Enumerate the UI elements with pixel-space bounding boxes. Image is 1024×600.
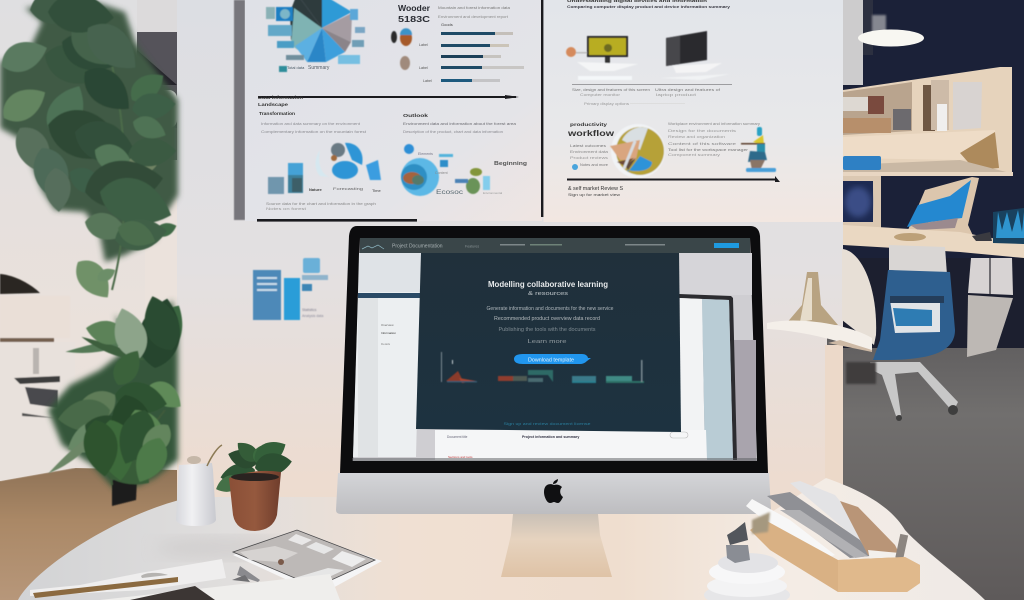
workflow heading: Latest outcomes	[570, 144, 606, 148]
pie labels	[287, 65, 330, 71]
pie side icons	[266, 7, 365, 72]
section text: left: Information and data summary on the environment	[261, 122, 361, 126]
upper climbing plant	[0, 0, 179, 305]
section text: right: Environment data and information about the forest area	[403, 122, 517, 126]
globe labels	[418, 152, 527, 196]
globe labels: Environmental	[483, 191, 503, 195]
bar chart	[419, 32, 524, 83]
illustration labels: Time	[372, 188, 382, 193]
bar chart: Label	[419, 43, 428, 47]
dark tablet at edge	[130, 586, 215, 600]
top text lines: Comparing computer display product and device information summary	[567, 4, 731, 9]
bottom white pane: Sections and tools	[448, 455, 473, 459]
section text: left: Data information	[258, 95, 303, 100]
top toolbar: Features	[465, 244, 479, 248]
background: main wall	[177, 0, 843, 600]
main desk	[18, 478, 985, 600]
ceramic stack and figurine	[704, 512, 790, 600]
footer text: & self market Review S	[568, 186, 624, 192]
tablet on desk	[233, 530, 382, 595]
call to action button	[514, 354, 591, 364]
top toolbar: Project Documentation	[392, 244, 443, 250]
globe labels: Elements	[418, 152, 433, 156]
left light pane: Details	[381, 342, 391, 346]
left light pane: Information	[381, 331, 396, 335]
workflow text	[668, 122, 760, 157]
top text lines	[567, 0, 731, 9]
small wall graphic: Analysis data	[302, 314, 323, 318]
workflow text: Tool list for the workspace manager	[668, 148, 749, 152]
divider arrow	[258, 95, 519, 99]
icons beside bars	[391, 28, 412, 70]
section text: left: Landscape	[258, 102, 289, 107]
heading: Wooder	[398, 4, 430, 13]
foliage mass	[48, 300, 178, 490]
device captions: Ultra design and features of	[655, 88, 721, 92]
monitor chin	[336, 473, 771, 514]
top toolbar	[360, 238, 750, 253]
mini charts	[441, 352, 644, 383]
section text: left: Transformation	[259, 111, 295, 116]
panel footer: Sign up and review document license	[504, 422, 590, 426]
blue box on shelf	[843, 156, 881, 170]
heading: 5183C	[398, 15, 430, 24]
workflow text: Review and organization	[668, 135, 725, 139]
bottom white pane: Document title	[447, 435, 468, 439]
section text: right: Description of the product, chart and data information	[403, 130, 503, 134]
pencil and eraser	[232, 566, 260, 582]
panel body text: Generate information and documents for the new service	[486, 306, 614, 312]
globe labels: Content	[435, 171, 448, 175]
workflow heading: Notes and more	[580, 163, 608, 167]
small wall graphic	[253, 258, 328, 320]
screen background	[353, 238, 757, 461]
heading: Environment and development report	[438, 15, 508, 19]
small wall graphic: Statistics	[302, 308, 317, 312]
illustration labels: Notes on forest	[266, 207, 306, 211]
poster border lines	[257, 0, 543, 222]
dark overlay panel: & resources	[528, 291, 569, 297]
dark overlay panel: Learn more	[528, 339, 567, 345]
workflow text: Design for the documents	[668, 129, 736, 133]
workflow heading	[567, 122, 615, 170]
background: left room wall	[0, 0, 178, 600]
desk lamp	[767, 272, 872, 352]
foliage mass	[0, 0, 178, 262]
workflow text: Workplace environment and information summary	[668, 122, 760, 126]
dark overlay panel: Recommended product overview data record	[494, 316, 600, 322]
pie chart	[290, 0, 352, 62]
imac monitor	[340, 226, 768, 473]
icon: apple logo	[544, 479, 563, 503]
poster: left infographic	[234, 0, 543, 222]
background: left floor	[0, 468, 178, 600]
potted plant on desk	[207, 435, 294, 531]
device captions: Computer monitor	[580, 93, 621, 97]
pendant lamp	[858, 15, 924, 46]
laptop illustration	[660, 31, 730, 80]
notebook and pen	[30, 559, 340, 600]
left light pane: Overview	[381, 323, 394, 327]
background: dark navy wall	[843, 0, 1024, 348]
workflow heading: Product reviews	[570, 156, 608, 160]
right grey pane and laptop	[679, 253, 756, 461]
workflow text: Component summary	[668, 153, 720, 157]
section text: right	[403, 113, 517, 134]
device captions: laptop product	[656, 93, 698, 97]
white vase	[176, 456, 216, 526]
heading: Goods	[441, 22, 453, 27]
bottom white pane	[352, 430, 757, 461]
illustration: left group	[268, 143, 381, 194]
desktop monitor illustration	[566, 36, 638, 80]
dark overlay panel: Publishing the tools with the documents	[498, 327, 596, 333]
storage cabinet	[967, 258, 1013, 357]
globe labels: Ecosoc	[436, 190, 463, 196]
footer text: Sign up for market view	[568, 193, 620, 197]
panel title: Modelling collaborative learning	[488, 279, 608, 289]
illustration labels: Source data for the chart and information in the graph	[266, 202, 376, 206]
illustration labels: Nature	[309, 187, 322, 192]
device captions: Size, design and features of this screen	[572, 88, 650, 92]
wooden shelf unit	[843, 67, 1013, 176]
figure illustration	[741, 127, 776, 172]
workflow text: Content of this software	[668, 142, 736, 146]
illustration labels: Forecasting	[333, 187, 363, 191]
bar chart: Label	[419, 66, 428, 70]
left light pane	[353, 253, 421, 457]
background: left sofa and shelf	[0, 274, 75, 481]
background: right room floor	[827, 335, 1024, 600]
globe labels: Beginning	[494, 161, 527, 167]
heading	[398, 4, 510, 27]
background: dark recess behind plant	[137, 0, 177, 480]
phones and papers in tray	[746, 481, 908, 560]
desk shadow	[155, 536, 295, 560]
circular illustration	[610, 124, 665, 178]
section text: right: Outlook	[403, 113, 429, 118]
poster: right infographic	[544, 0, 843, 222]
monitor bezel	[340, 226, 768, 473]
dark overlay panel	[416, 253, 681, 432]
section text: left: Complementary information on the mountain forest	[261, 130, 367, 134]
wall edge partition	[825, 345, 843, 485]
divider arrow	[567, 176, 780, 182]
heading: Mountain and forest information data	[438, 6, 510, 10]
bar chart: Label	[423, 79, 432, 83]
tan desk organizer	[746, 481, 920, 592]
lower floor plant	[46, 291, 194, 506]
pie labels: Summary	[308, 65, 330, 71]
call to action button: Download template	[528, 358, 574, 364]
lower desk with monitor and blue shape	[843, 176, 1024, 258]
section text: left	[258, 95, 367, 134]
workflow heading: workflow	[567, 129, 615, 138]
footer text	[568, 186, 624, 197]
pie labels: Total data	[287, 65, 305, 70]
illustration labels	[266, 187, 382, 211]
device captions	[572, 84, 732, 106]
organizer box	[750, 520, 920, 592]
monitor stand	[501, 514, 612, 577]
illustration: globe group	[401, 144, 490, 196]
workflow heading: Environment data	[570, 150, 608, 154]
workflow heading: productivity	[570, 122, 608, 127]
device captions: Primary display options	[584, 102, 629, 106]
blue office chair	[846, 245, 958, 421]
white chair back	[842, 249, 876, 345]
bottom white pane: Project information and summary	[522, 435, 579, 439]
